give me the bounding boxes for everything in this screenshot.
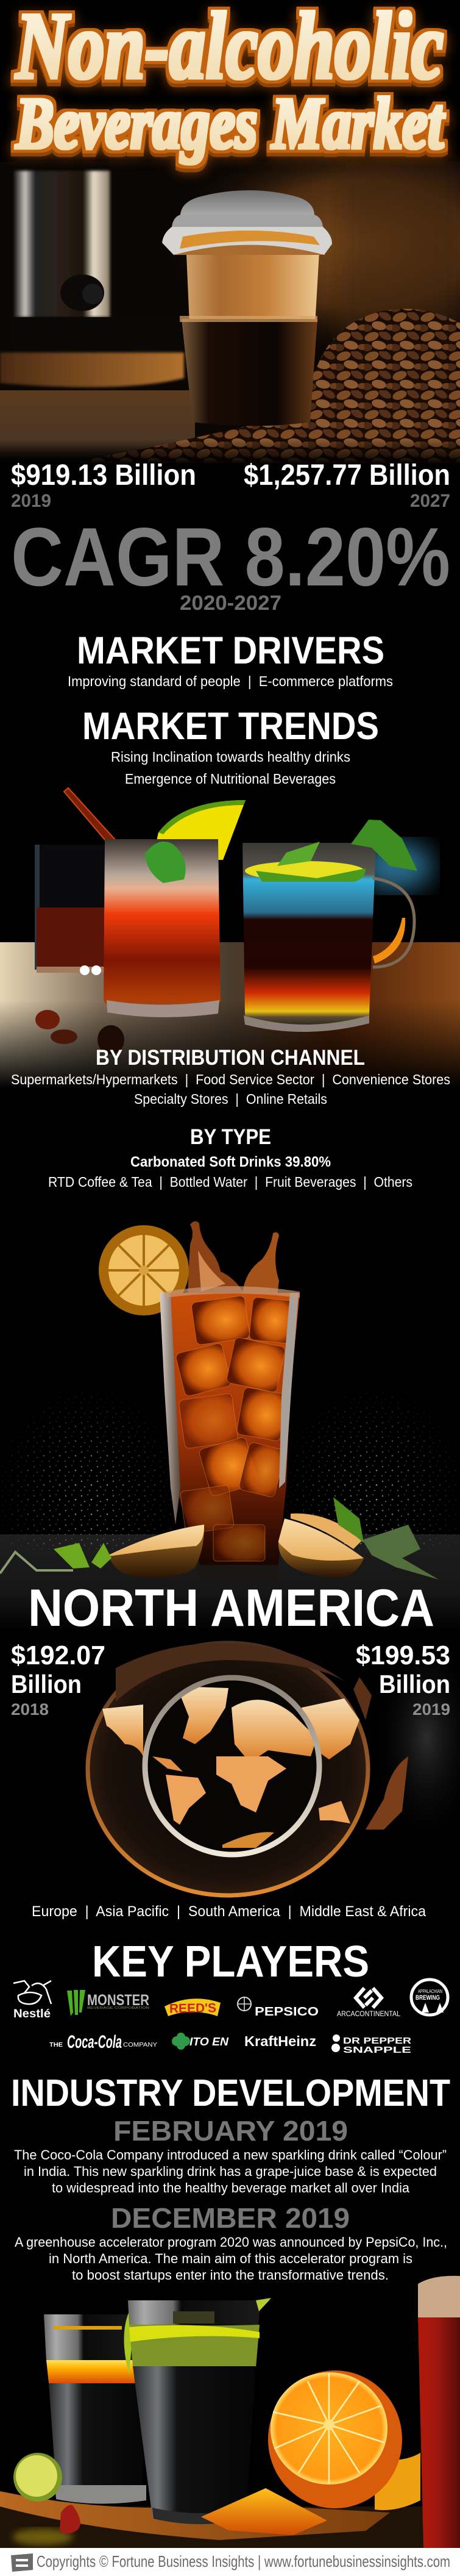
hero photo: coffee cup and beans (0, 128, 460, 465)
logo: Appalachian Brewing (411, 1980, 448, 2015)
december 2019 development: to boost startups enter into the transformative trends. (72, 2267, 389, 2283)
logo: Dr Pepper Snapple: DR PEPPER (343, 2036, 411, 2046)
title (15, 0, 445, 165)
north america heading: NORTH AMERICA (28, 1579, 434, 1637)
february 2019 development (14, 2115, 447, 2195)
CAGR: 2020-2027 (180, 592, 281, 615)
logo: Coca-Cola: COMPANY (123, 2042, 157, 2048)
bottom photo: juices and oranges (0, 2276, 460, 2548)
by distribution channel (11, 1046, 450, 1107)
february 2019 development: in India. This new sparkling drink has a grape-juice base & is expected (24, 2164, 437, 2179)
logo: Coca-Cola: THE (49, 2042, 63, 2048)
december 2019 development: DECEMBER 2019 (111, 2202, 350, 2234)
logo: Monster: MONSTER (87, 1992, 149, 2009)
december 2019 development: A greenhouse accelerator program 2020 was announced by PepsiCo, Inc., (15, 2234, 447, 2250)
key players heading: KEY PLAYERS (92, 1937, 369, 1986)
north america value 2018: $192.07 (11, 1640, 105, 1670)
logo: Monster (67, 1990, 150, 2016)
market drivers: Improving standard of people | E-commerce platforms (68, 673, 393, 689)
market size 2027: 2027 (410, 491, 450, 511)
iced drink photo (0, 1221, 460, 1632)
north america value 2018: 2018 (11, 1700, 49, 1719)
logo: Coca-Cola: Coca-Cola (67, 2032, 122, 2052)
by type: Carbonated Soft Drinks 39.80% (130, 1154, 331, 1170)
logo: Arca Continental (337, 1988, 400, 2018)
logo: Nestle (13, 1981, 51, 2020)
february 2019 development: to widespread into the healthy beverage market all over India (52, 2180, 410, 2195)
logo: Reed's: REED'S (169, 2001, 216, 2016)
february 2019 development: The Coco-Cola Company introduced a new sparkling drink called “Colour” (14, 2147, 447, 2163)
market trends (82, 705, 379, 787)
december 2019 development: in North America. The main aim of this accelerator program is (49, 2251, 412, 2266)
logo: Kraft Heinz: KraftHeinz (244, 2033, 316, 2049)
world map in coffee cup (86, 1628, 460, 1897)
north america value 2019: 2019 (412, 1700, 450, 1719)
logo: Nestle: Nestlé (13, 2008, 51, 2020)
market trends: Emergence of Nutritional Beverages (125, 771, 336, 787)
market trends: Rising Inclination towards healthy drinks (111, 749, 350, 765)
drinks photo: cocktail glasses (0, 788, 460, 1089)
north america value 2019: Billion (379, 1670, 450, 1698)
by type: RTD Coffee & Tea | Bottled Water | Fruit Beverages | Others (48, 1174, 412, 1190)
north america value 2018: Billion (11, 1670, 82, 1698)
footer bar (0, 2548, 460, 2576)
logo: PepsiCo: PEPSICO (255, 2005, 319, 2019)
logo: Ito En: ITO EN (189, 2036, 229, 2048)
logo: Arca Continental: ARCACONTINENTAL (337, 2009, 400, 2018)
other regions: Europe | Asia Pacific | South America | Middle East & Africa (32, 1903, 426, 1920)
market drivers (68, 629, 393, 689)
logo: Appalachian Brewing: APPALACHIAN (418, 1989, 442, 1994)
market size 2027 (244, 459, 450, 511)
logo: Monster: BEVERAGE CORPORATION (87, 2006, 150, 2010)
by type: BY TYPE (190, 1125, 271, 1149)
logo: Dr Pepper Snapple: SNAPPLE (343, 2045, 411, 2055)
market size 2019: 2019 (11, 491, 51, 511)
by distribution channel: BY DISTRIBUTION CHANNEL (96, 1046, 365, 1070)
by distribution channel: Specialty Stores | Online Retails (134, 1091, 327, 1107)
february 2019 development: FEBRUARY 2019 (113, 2115, 348, 2147)
north america value 2019 (356, 1640, 450, 1719)
market drivers: MARKET DRIVERS (77, 629, 384, 672)
north america value 2019: $199.53 (356, 1640, 450, 1670)
market size 2019: $919.13 Billion (11, 459, 196, 492)
logo: Dr Pepper Snapple (331, 2034, 411, 2055)
december 2019 development (15, 2202, 447, 2283)
logo: Ito En (172, 2033, 229, 2050)
market trends: MARKET TRENDS (82, 705, 379, 748)
north america value 2018 (11, 1640, 105, 1719)
logo: PepsiCo (238, 1997, 319, 2019)
logo: Appalachian Brewing: BREWING (416, 1994, 440, 2002)
icon: Fortune Business Insights logo (11, 2553, 33, 2572)
by type (48, 1125, 412, 1190)
market size 2019 (11, 459, 196, 511)
